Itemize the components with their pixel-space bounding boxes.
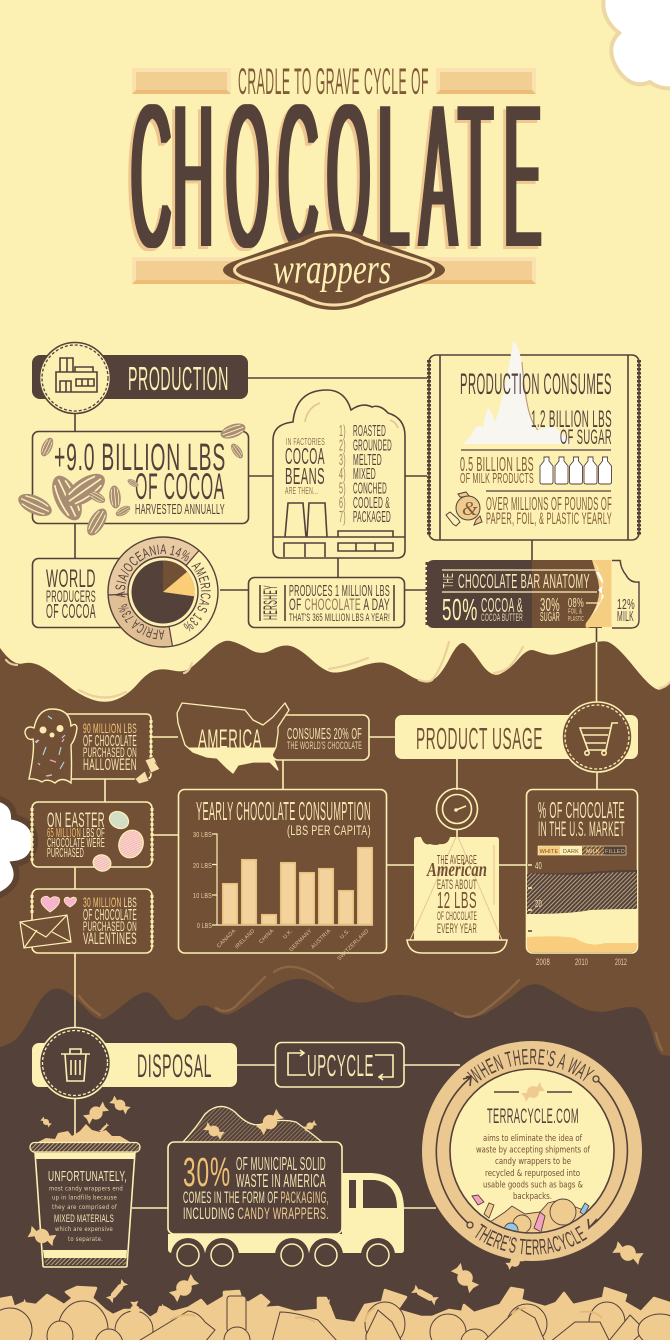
legend: MILK — [586, 849, 600, 855]
icon: scale dial — [436, 788, 478, 837]
pie chart: producers by region: AMERICAS 13% — [184, 562, 211, 632]
panel: america consumes: CONSUMES 20% OF — [287, 726, 362, 743]
bar chart: 0 LBS — [197, 921, 212, 930]
panel: hershey: PRODUCES 1 MILLION LBS — [289, 583, 390, 600]
panel: chocolate bar anatomy: 12% — [617, 596, 635, 613]
panel: average american on scale: THE AVERAGE — [437, 852, 477, 867]
heading: production: PRODUCTION — [128, 360, 229, 397]
area chart: 40 — [535, 861, 542, 872]
panel: percent of chocolate market — [526, 790, 638, 967]
process list: MELTED — [353, 452, 382, 469]
panel: landfill bin: they are comprised of — [52, 1203, 117, 1211]
bar chart: CANADA — [216, 928, 237, 950]
badge: terracycle: THERE'S TERRACYCLE — [475, 1224, 588, 1255]
map: america: AMERICA — [198, 724, 262, 754]
heading: product usage — [395, 702, 638, 772]
bar chart: GERMANY — [288, 928, 313, 953]
badge: terracycle — [422, 1041, 642, 1261]
panel: factory process: IN FACTORIES — [286, 437, 325, 448]
description: recycled & repurposed into — [485, 1169, 580, 1179]
truck container text panel: WASTE IN AMERICA — [236, 1170, 326, 1191]
panel: halloween: PURCHASED ON — [83, 744, 137, 760]
panel: percent of chocolate market: 2010 — [575, 957, 588, 967]
panel: landfill bin: UNFORTUNATELY, — [48, 1169, 127, 1185]
panel: billion lbs of cocoa: HARVESTED ANNUALLY — [135, 502, 225, 518]
panel: average american on scale: American — [426, 859, 487, 881]
process list — [339, 423, 392, 526]
panel: chocolate bar anatomy: PLASTIC — [568, 616, 584, 623]
truck container text panel — [168, 1142, 342, 1234]
panel: chocolate bar anatomy: 50% — [442, 592, 478, 627]
description: waste by accepting shipments of — [476, 1146, 591, 1156]
cloud: left edge — [0, 798, 35, 897]
panel: yearly chocolate consumption — [178, 790, 386, 962]
bar chart: 30 LBS — [193, 830, 212, 839]
panel: average american on scale: EVERY YEAR — [437, 920, 477, 936]
panel: halloween: HALLOWEEN — [83, 755, 137, 774]
candy divider — [494, 1081, 572, 1103]
panel: chocolate bar anatomy: COCOA BUTTER — [481, 612, 523, 624]
panel: factory process: ROASTED — [353, 423, 386, 440]
panel: valentines: PURCHASED ON — [83, 918, 137, 934]
process list: 2) — [339, 438, 346, 454]
panel: average american on scale: OF CHOCOLATE — [437, 909, 477, 923]
icon: envelope — [20, 915, 71, 948]
panel: factory process: BEANS — [285, 463, 325, 489]
panel: chocolate bar anatomy: 30% — [540, 595, 560, 615]
main title: CHOCOLATE — [131, 60, 541, 291]
panel: billion lbs of cocoa: OF COCOA — [135, 466, 225, 507]
wrappers overflowing bin — [38, 1095, 131, 1142]
process list: MIXED — [353, 466, 376, 483]
process list: 7) — [339, 509, 346, 526]
panel: easter: CHOCOLATE WERE — [47, 835, 105, 850]
pile silhouette — [0, 1287, 670, 1340]
icon: wrapped candy ampersand — [446, 492, 482, 526]
panel: factory process — [273, 390, 405, 558]
bar chart: U.K. — [282, 928, 295, 941]
panel: world producers of cocoa: PRODUCERS — [46, 587, 96, 606]
chocolate bar strips — [132, 68, 536, 284]
panel: hershey: OF CHOCOLATE A DAY — [289, 595, 390, 614]
panel: easter: 65 MILLION LBS OF — [47, 825, 105, 840]
title block — [131, 60, 541, 310]
truck container text panel: 30% — [183, 1149, 231, 1195]
panel: easter — [32, 802, 152, 874]
wheels — [171, 1238, 395, 1272]
panel: valentines: 30 MILLION LBS — [83, 894, 137, 910]
heading: production — [32, 342, 248, 414]
legend: FILLED — [605, 849, 625, 855]
panel: factory process: PACKAGED — [353, 509, 391, 526]
heading: disposal — [32, 1028, 237, 1098]
truck load — [183, 1106, 322, 1142]
connector lines: production — [75, 378, 596, 642]
wrappers pile and loose candies — [0, 1240, 670, 1340]
panel: factory process: COOLED & — [353, 495, 390, 512]
drip highlights on dark — [79, 967, 662, 1050]
icon: sugar pile — [462, 341, 572, 444]
illustration: garbage truck — [168, 1106, 404, 1272]
panel: factory process: ARE THEN... — [285, 486, 318, 497]
panel: chocolate bar anatomy: THE — [440, 573, 457, 588]
pie chart: producers by region: ASIA/OCEANIA 14% — [116, 544, 190, 598]
truck container text panel: OF MUNICIPAL SOLID — [236, 1153, 326, 1174]
panel: yearly chocolate consumption: (LBS PER CAPITA) — [287, 822, 371, 838]
panel: valentines — [20, 889, 152, 953]
legend: WHITE — [540, 849, 559, 855]
pie chart: producers by region: AFRICA 73% — [118, 604, 164, 640]
panel: hershey — [248, 578, 404, 628]
candy pile inside badge — [471, 1194, 590, 1232]
box: upcycle — [276, 1042, 404, 1087]
badge: wrappers: wrappers — [273, 247, 391, 293]
panel: landfill bin: which are expensive — [55, 1225, 113, 1233]
panel: halloween: 90 MILLION LBS — [83, 720, 137, 736]
bar chart: U.S. — [339, 928, 352, 941]
panel: landfill bin — [27, 1095, 140, 1267]
icon: shopping cart — [562, 702, 632, 772]
bar chart: CHINA — [258, 928, 275, 945]
icon: easter eggs — [91, 808, 147, 874]
legend — [538, 846, 626, 855]
panel: america consumes: THE WORLD'S CHOCOLATE — [287, 740, 362, 752]
badge: terracycle: WHEN THERE'S A WAY — [466, 1048, 595, 1084]
background: milk chocolate drip — [0, 641, 670, 1340]
bar chart — [193, 830, 373, 962]
panel: factory process: COCOA — [285, 443, 325, 469]
connector lines: disposal — [75, 1030, 460, 1208]
panel: production consumes — [429, 341, 639, 540]
cloud: top right — [603, 0, 670, 88]
truck container text panel: COMES IN THE FORM OF PACKAGING, — [183, 1188, 329, 1207]
truck cab — [342, 1173, 404, 1253]
panel: chocolate bar anatomy: MILK — [617, 608, 634, 625]
icon: cocoa beans — [15, 420, 247, 539]
panel: percent of chocolate market: 2012 — [615, 957, 627, 967]
panel: average american on scale: 12 LBS — [437, 887, 477, 913]
description: usable goods such as bags & — [483, 1180, 583, 1190]
icon: bells — [135, 757, 160, 784]
panel: billion lbs of cocoa: +9.0 BILLION LBS — [54, 437, 226, 479]
panel: hershey: THAT'S 365 MILLION LBS A YEAR! — [289, 612, 390, 624]
panel: average american on scale — [407, 837, 507, 953]
bar chart: 20 LBS — [193, 861, 212, 870]
description: aims to eliminate the idea of — [483, 1134, 583, 1144]
box: upcycle: UPCYCLE — [307, 1048, 374, 1083]
icon: hearts — [41, 896, 76, 912]
circular arrows — [436, 1076, 627, 1228]
truck container text panel: INCLUDING CANDY WRAPPERS. — [183, 1204, 329, 1223]
panel: factory process: GROUNDED — [353, 438, 392, 454]
icon: trash can — [40, 1028, 110, 1098]
panel: billion lbs of cocoa — [15, 420, 248, 539]
panel: production consumes: OF MILK PRODUCTS — [460, 471, 534, 487]
panel: landfill bin: MIXED MATERIALS — [54, 1213, 114, 1225]
panel: world producers of cocoa — [32, 536, 219, 648]
process list: 1) — [339, 423, 346, 440]
panel: easter: PURCHASED — [47, 845, 84, 860]
panel: landfill bin: to separate. — [68, 1235, 103, 1243]
panel: halloween: OF CHOCOLATE — [83, 733, 137, 750]
panel: production consumes: 0.5 BILLION LBS — [460, 454, 534, 476]
area chart — [527, 861, 637, 953]
panel: chocolate bar anatomy: FOIL & — [568, 608, 582, 616]
icon: factory — [40, 342, 110, 414]
bar chart: SWITZERLAND — [337, 928, 370, 962]
panel: america consumes — [177, 703, 369, 773]
connector lines: usage — [75, 642, 597, 1030]
panel: easter: ON EASTER — [47, 809, 105, 832]
process list: 4) — [339, 466, 346, 483]
icon: ghost — [25, 709, 77, 783]
icon: milk bottles — [540, 457, 612, 484]
bar chart: 10 LBS — [193, 891, 212, 900]
panel: world producers of cocoa: WORLD — [46, 565, 96, 593]
map: america — [177, 703, 289, 773]
panel: percent of chocolate market: 2008 — [536, 957, 550, 967]
panel: valentines: VALENTINES — [83, 929, 137, 948]
panel: factory process: CONCHED — [353, 480, 387, 498]
bar chart: IRELAND — [234, 928, 256, 950]
panel: production consumes: & — [462, 498, 478, 520]
panel: average american on scale: EATS ABOUT — [437, 876, 477, 892]
process list: 6) — [339, 495, 346, 512]
process list: 3) — [339, 452, 346, 469]
panel: landfill bin: most candy wrappers end — [49, 1184, 123, 1192]
panel: chocolate bar anatomy — [427, 560, 639, 628]
area chart: 20 — [535, 899, 542, 910]
panel: chocolate bar anatomy: SUGAR — [540, 609, 560, 624]
panel: chocolate bar anatomy: COCOA & — [481, 595, 523, 617]
description: backpacks. — [513, 1192, 552, 1202]
description: candy wrappers to be — [495, 1157, 571, 1167]
process list: 5) — [339, 480, 346, 498]
panel: halloween — [25, 709, 160, 784]
truck chassis — [168, 1234, 345, 1253]
heading: disposal: DISPOSAL — [137, 1048, 212, 1084]
panel: landfill bin: up in landfills because — [52, 1194, 117, 1202]
panel: valentines: OF CHOCOLATE — [83, 907, 137, 924]
bar chart: AUSTRIA — [310, 928, 332, 950]
pile outlines — [0, 1296, 670, 1340]
badge: wrappers — [223, 230, 445, 310]
legend: DARK — [563, 849, 579, 855]
panel: chocolate bar anatomy: 08% — [568, 596, 584, 610]
description — [476, 1134, 591, 1202]
panel: world producers of cocoa: OF COCOA — [46, 601, 96, 623]
pie chart: producers by region — [107, 536, 219, 648]
infographic canvas: HERSHEY — [261, 585, 282, 620]
drip highlights — [6, 642, 670, 698]
background: dark chocolate drip — [0, 979, 670, 1340]
